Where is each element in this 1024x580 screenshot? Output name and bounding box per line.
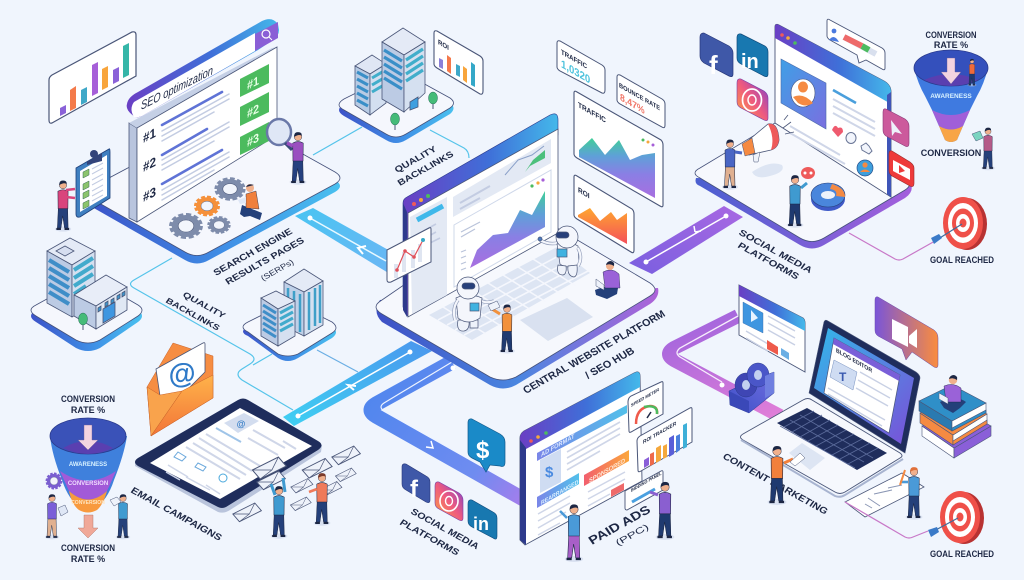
screen: search results xyxy=(129,47,277,222)
arrow xyxy=(931,224,962,244)
funnel footer: RATE % xyxy=(71,554,105,564)
laptop base xyxy=(740,398,902,494)
retargeted block: REARRANGED xyxy=(541,479,579,507)
sponsored block: SPONSORED xyxy=(589,457,625,485)
person with tablet xyxy=(488,301,515,354)
funnel heading: RATE % xyxy=(71,405,105,415)
connector: hub to email xyxy=(283,341,432,426)
keyboard xyxy=(429,247,590,340)
bounce rate card: 8,47% xyxy=(620,92,645,117)
ad format block: AD FORMAT xyxy=(541,433,574,459)
label: social media bottom: SOCIAL MEDIA xyxy=(408,507,481,552)
profile picture xyxy=(781,59,826,129)
panel: backlink towers left xyxy=(31,238,142,351)
connector: thin backlink lines xyxy=(130,127,469,410)
panel: traffic and ROI cards xyxy=(557,41,665,253)
label: SERPs: RESULTS PAGES xyxy=(224,236,307,287)
robot right xyxy=(538,226,580,277)
blog editor window xyxy=(824,338,900,433)
chart panel xyxy=(454,170,551,287)
search query: SEO optimization xyxy=(141,63,213,113)
funnel: top right: AWARENESS xyxy=(930,93,972,100)
woman running xyxy=(309,473,330,526)
funnel: bottom left xyxy=(45,394,130,564)
icon: cursor tile xyxy=(883,109,909,147)
funnel heading xyxy=(61,394,115,415)
note paper xyxy=(845,473,924,517)
label: social media top: PLATFORMS xyxy=(735,241,801,282)
icon: facebook: f xyxy=(709,50,718,80)
speed meter card xyxy=(628,382,663,432)
traffic number card: 1,0320 xyxy=(561,58,590,87)
panel: backlink towers center xyxy=(243,269,336,361)
funnel: top right xyxy=(914,30,995,170)
label: quality backlinks lower: BACKLINKS xyxy=(164,296,222,332)
letter xyxy=(156,343,205,396)
rank labels: #1 xyxy=(143,125,156,146)
donut chart xyxy=(811,183,845,211)
funnel footer: CONVERSION xyxy=(921,148,981,158)
scattered envelopes xyxy=(233,446,360,522)
section labels xyxy=(128,143,814,558)
icon: dollar bubble: $ xyxy=(476,437,490,464)
man with tablet xyxy=(110,494,130,539)
laptop screen xyxy=(809,320,920,453)
ROI card xyxy=(434,31,483,94)
trees xyxy=(390,92,438,130)
rank badges: #2 xyxy=(247,101,259,121)
tablet: @ xyxy=(237,419,246,429)
icon: facebook: f xyxy=(410,476,419,503)
budget card: BIDDING PANEL xyxy=(631,470,662,493)
keyboard xyxy=(777,408,887,470)
tablet xyxy=(135,398,322,513)
funnel heading: CONVERSION xyxy=(61,394,115,404)
top panel xyxy=(453,139,551,217)
laptop xyxy=(740,320,920,497)
bounce rate card: BOUNCE RATE xyxy=(619,82,661,113)
icon: linkedin xyxy=(737,34,768,77)
icon: video tile xyxy=(889,151,914,187)
person at screen xyxy=(560,504,583,562)
traffic number card: TRAFFIC xyxy=(561,49,587,71)
panel: paid ads xyxy=(520,372,692,562)
post lines xyxy=(833,90,856,103)
traffic number card xyxy=(557,41,605,93)
rank badges: #3 xyxy=(247,130,259,150)
rank badges: #1 xyxy=(247,73,259,93)
envelope xyxy=(147,343,213,436)
platform: SERP base xyxy=(87,116,340,264)
ad format block: $ xyxy=(545,464,554,481)
label: social media top: SOCIAL MEDIA xyxy=(736,228,814,276)
arrow xyxy=(928,518,958,537)
panel: central hub xyxy=(376,114,658,389)
screen xyxy=(403,114,558,317)
label: SERPs: (SERPs) xyxy=(259,257,296,283)
icon: instagram xyxy=(435,482,463,521)
tower short xyxy=(355,55,386,115)
gears xyxy=(173,180,242,236)
office tower xyxy=(47,238,95,317)
label: paid ads: PAID ADS xyxy=(586,502,653,547)
magnifier xyxy=(267,119,292,150)
seated person with laptop xyxy=(595,261,620,299)
woman with megaphone xyxy=(722,140,742,190)
video camera xyxy=(729,363,774,413)
sidebar xyxy=(410,197,447,314)
platform xyxy=(376,209,658,388)
ROI tracker card: ROI TRACKER xyxy=(643,421,676,446)
connector: hub to social xyxy=(629,206,743,274)
result lines xyxy=(162,92,229,200)
person with card xyxy=(650,482,674,540)
person with magnifier xyxy=(287,132,306,185)
chat bubble xyxy=(801,167,815,179)
tower front xyxy=(261,291,295,346)
panel: SERP xyxy=(49,19,340,264)
man reading xyxy=(768,446,805,505)
rank labels: #3 xyxy=(143,184,156,205)
label: GOAL REACHED xyxy=(930,255,994,265)
sponsored block xyxy=(584,450,629,506)
label: quality backlinks lower: QUALITY xyxy=(181,290,228,320)
person holding envelope xyxy=(271,478,287,539)
rank labels xyxy=(143,125,156,205)
budget card xyxy=(625,470,663,510)
person in funnel xyxy=(968,59,976,86)
icon: facebook xyxy=(700,33,733,80)
tree xyxy=(78,313,88,330)
person with laptop xyxy=(972,128,995,170)
ROI chart: ROI xyxy=(578,185,590,201)
man with bubble xyxy=(787,175,807,228)
ROI chart xyxy=(574,175,634,253)
retargeted block xyxy=(537,473,579,535)
label: social media bottom: PLATFORMS xyxy=(397,518,461,558)
ad screen xyxy=(520,372,642,545)
clipboard xyxy=(76,149,110,217)
rank labels: #2 xyxy=(143,154,156,175)
funnel: bottom left: CONVERSION xyxy=(71,500,105,506)
label: quality backlinks top: QUALITY xyxy=(392,143,439,175)
icon: linkedin: in xyxy=(741,51,759,73)
platform xyxy=(695,120,912,248)
chart card top-left xyxy=(49,32,136,123)
connector: hub to paid ads xyxy=(371,362,525,500)
icon: linkedin: in xyxy=(473,514,489,534)
megaphone xyxy=(742,115,794,162)
connector: SERP to hub xyxy=(295,208,392,274)
woman with laptop xyxy=(45,494,68,539)
label: quality backlinks top: BACKLINKS xyxy=(395,149,455,188)
funnel: bottom left: AWARENESS xyxy=(69,462,107,468)
woman writing xyxy=(900,467,922,520)
ad format block xyxy=(537,405,627,493)
trackpad xyxy=(789,443,825,470)
traffic area chart: TRAFFIC xyxy=(578,100,606,125)
panel: social icons bottom xyxy=(402,419,505,539)
funnel: bottom left: CONVERSION xyxy=(68,481,108,487)
woman with clipboard xyxy=(55,181,75,232)
label: SERPs: SEARCH ENGINE xyxy=(212,227,295,278)
speed meter card: SPEED METER xyxy=(631,387,660,408)
tower back xyxy=(284,269,323,336)
section label: CONTENT MARKETING xyxy=(720,452,830,517)
ROI card: ROI xyxy=(438,39,449,52)
tower tall xyxy=(382,28,425,112)
icon: instagram xyxy=(737,79,768,121)
label: GOAL REACHED xyxy=(930,549,994,559)
panel: email xyxy=(135,343,360,539)
goal: top right xyxy=(849,197,994,265)
label: central hub: / SEO HUB xyxy=(583,346,637,381)
mini trend card xyxy=(387,228,431,282)
low office xyxy=(74,275,127,329)
funnel footer xyxy=(61,543,115,564)
panel: content marketing xyxy=(720,285,991,520)
funnel footer: CONVERSION xyxy=(61,543,115,553)
video card xyxy=(739,285,805,372)
kneeling mechanic xyxy=(238,184,262,220)
panel: social media xyxy=(695,19,914,249)
connector: hub to content xyxy=(669,316,780,416)
panel: backlink towers top xyxy=(339,28,483,143)
gear icon xyxy=(48,474,60,488)
label: email campaigns: EMAIL CAMPAIGNS xyxy=(128,486,224,543)
blog editor window: T xyxy=(839,370,847,384)
seated reader xyxy=(939,375,966,413)
funnel heading: RATE % xyxy=(934,40,968,50)
social screen xyxy=(775,24,891,197)
blog editor window: BLOG EDITOR xyxy=(836,348,873,375)
book stack xyxy=(919,385,991,458)
reaction icons xyxy=(832,126,873,176)
robot left xyxy=(454,277,494,331)
traffic area chart xyxy=(574,91,663,207)
funnel heading: CONVERSION xyxy=(926,30,976,40)
goal: bottom right xyxy=(845,491,994,559)
rank badges xyxy=(240,64,269,155)
funnel heading xyxy=(926,30,976,50)
label: central hub: CENTRAL WEBSITE PLATFORM xyxy=(521,309,668,396)
search bar xyxy=(127,19,279,117)
bounce rate card xyxy=(617,75,665,128)
envelope: @ xyxy=(167,357,197,390)
label: paid ads: (PPC) xyxy=(613,521,651,548)
ROI tracker card xyxy=(637,408,692,472)
label: quality backlinks lower xyxy=(164,290,228,332)
video chat bubble xyxy=(875,297,938,368)
trackpad xyxy=(520,298,593,341)
rating bubble xyxy=(827,19,885,70)
